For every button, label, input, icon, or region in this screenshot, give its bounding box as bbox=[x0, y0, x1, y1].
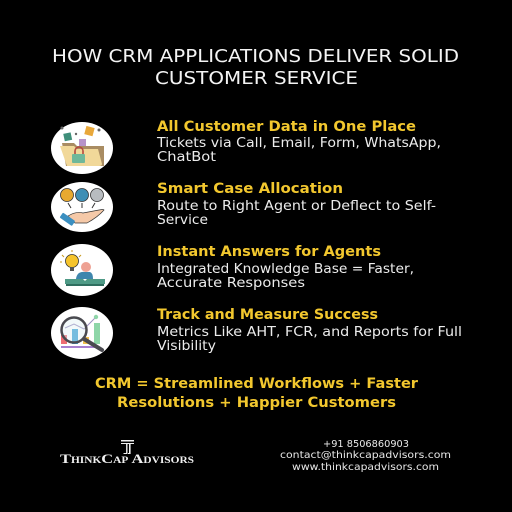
logo: ThinkCap Advisors: ThinkCap Advisors bbox=[60, 451, 194, 466]
summary callout bbox=[95, 376, 419, 411]
icon: bulb and book bbox=[51, 244, 113, 296]
text: knowledge base bbox=[157, 262, 414, 291]
heading: smart case allocation: Smart Case Allocation bbox=[157, 181, 343, 197]
icon: magnifier over charts bbox=[51, 307, 113, 359]
text: route bbox=[157, 199, 436, 228]
text: metrics bbox=[157, 325, 462, 354]
text: tickets: Tickets via Call, Email, Form, WhatsApp, bbox=[156, 136, 441, 151]
heading: track and measure: Track and Measure Success bbox=[157, 307, 378, 323]
icon: hand with options bbox=[51, 182, 113, 232]
contact details: www.thinkcapadvisors.com bbox=[292, 462, 439, 473]
title: HOW CRM APPLICATIONS DELIVER SOLID bbox=[52, 46, 459, 67]
text: route: Route to Right Agent or Deflect to Self- bbox=[157, 199, 436, 214]
heading: instant answers: Instant Answers for Agents bbox=[157, 244, 381, 260]
heading: all customer data: All Customer Data in One Place bbox=[157, 119, 416, 135]
text: tickets: ChatBot bbox=[157, 150, 216, 165]
text: knowledge base: Accurate Responses bbox=[157, 276, 305, 291]
title bbox=[52, 46, 459, 89]
text: metrics: Visibility bbox=[157, 339, 216, 354]
text: tickets bbox=[156, 136, 441, 165]
icon: folder with data bbox=[51, 122, 113, 174]
summary callout: CRM = Streamlined Workflows + Faster bbox=[95, 376, 419, 392]
text: route: Service bbox=[157, 213, 208, 228]
text: knowledge base: Integrated Knowledge Base = Faster, bbox=[157, 262, 414, 277]
contact details bbox=[280, 439, 451, 473]
text: metrics: Metrics Like AHT, FCR, and Reports for Full bbox=[157, 325, 462, 340]
summary callout: Resolutions + Happier Customers bbox=[117, 395, 396, 411]
contact details: contact@thinkcapadvisors.com bbox=[280, 450, 451, 461]
logo: ThinkCap Advisors bbox=[60, 440, 194, 466]
contact details: +91 8506860903 bbox=[323, 439, 409, 450]
title: CUSTOMER SERVICE bbox=[155, 68, 358, 89]
